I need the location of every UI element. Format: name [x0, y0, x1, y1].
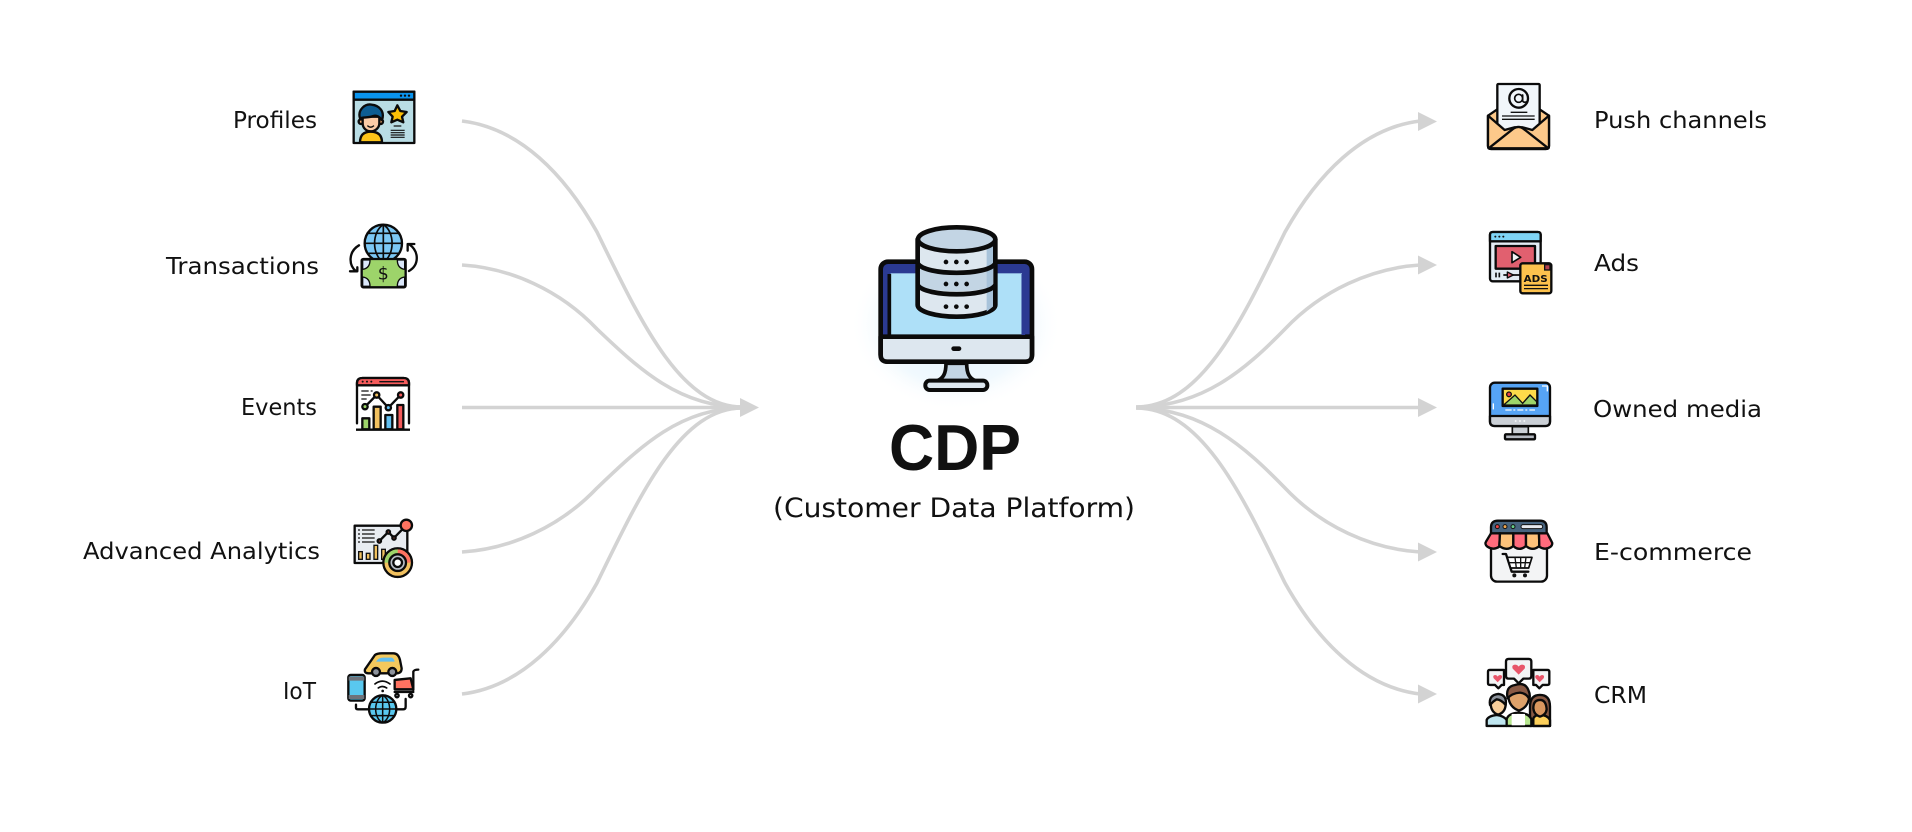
left converging arrows: [462, 121, 759, 694]
center icon glow: [850, 239, 1062, 411]
right output labels: Push channels: [1594, 108, 1767, 134]
icon: transactions: $: [378, 265, 389, 285]
right output labels: Owned media: [1593, 397, 1762, 423]
left input labels: Profiles: [233, 108, 317, 134]
subheading: (Customer Data Platform): [773, 493, 1135, 524]
icon: push channels: [1488, 84, 1549, 149]
icon: ads: [1490, 232, 1551, 293]
icon: database on monitor: [881, 227, 1032, 390]
icon: e-commerce: [1485, 521, 1552, 582]
heading: CDP: CDP: [889, 411, 1021, 484]
icon: events: [356, 378, 410, 430]
icon: advanced analytics: [355, 520, 412, 577]
icon: IoT: [348, 653, 418, 723]
right diverging arrows: [1136, 112, 1437, 704]
icon: CRM: [1487, 659, 1550, 726]
right output labels: E-commerce: [1594, 540, 1752, 566]
icon: transactions: [350, 225, 417, 287]
left input labels: Events: [241, 395, 317, 421]
icon: ads: ADS: [1524, 274, 1548, 285]
left input labels: Transactions: [165, 254, 319, 280]
icon: profiles: [354, 92, 414, 143]
left input labels: [83, 108, 320, 705]
left input labels: IoT: [283, 679, 317, 705]
right output labels: CRM: [1594, 683, 1647, 709]
icon: owned media: [1490, 383, 1550, 439]
right output labels: [1593, 108, 1767, 709]
right output labels: Ads: [1594, 251, 1639, 277]
left input labels: Advanced Analytics: [83, 539, 320, 565]
